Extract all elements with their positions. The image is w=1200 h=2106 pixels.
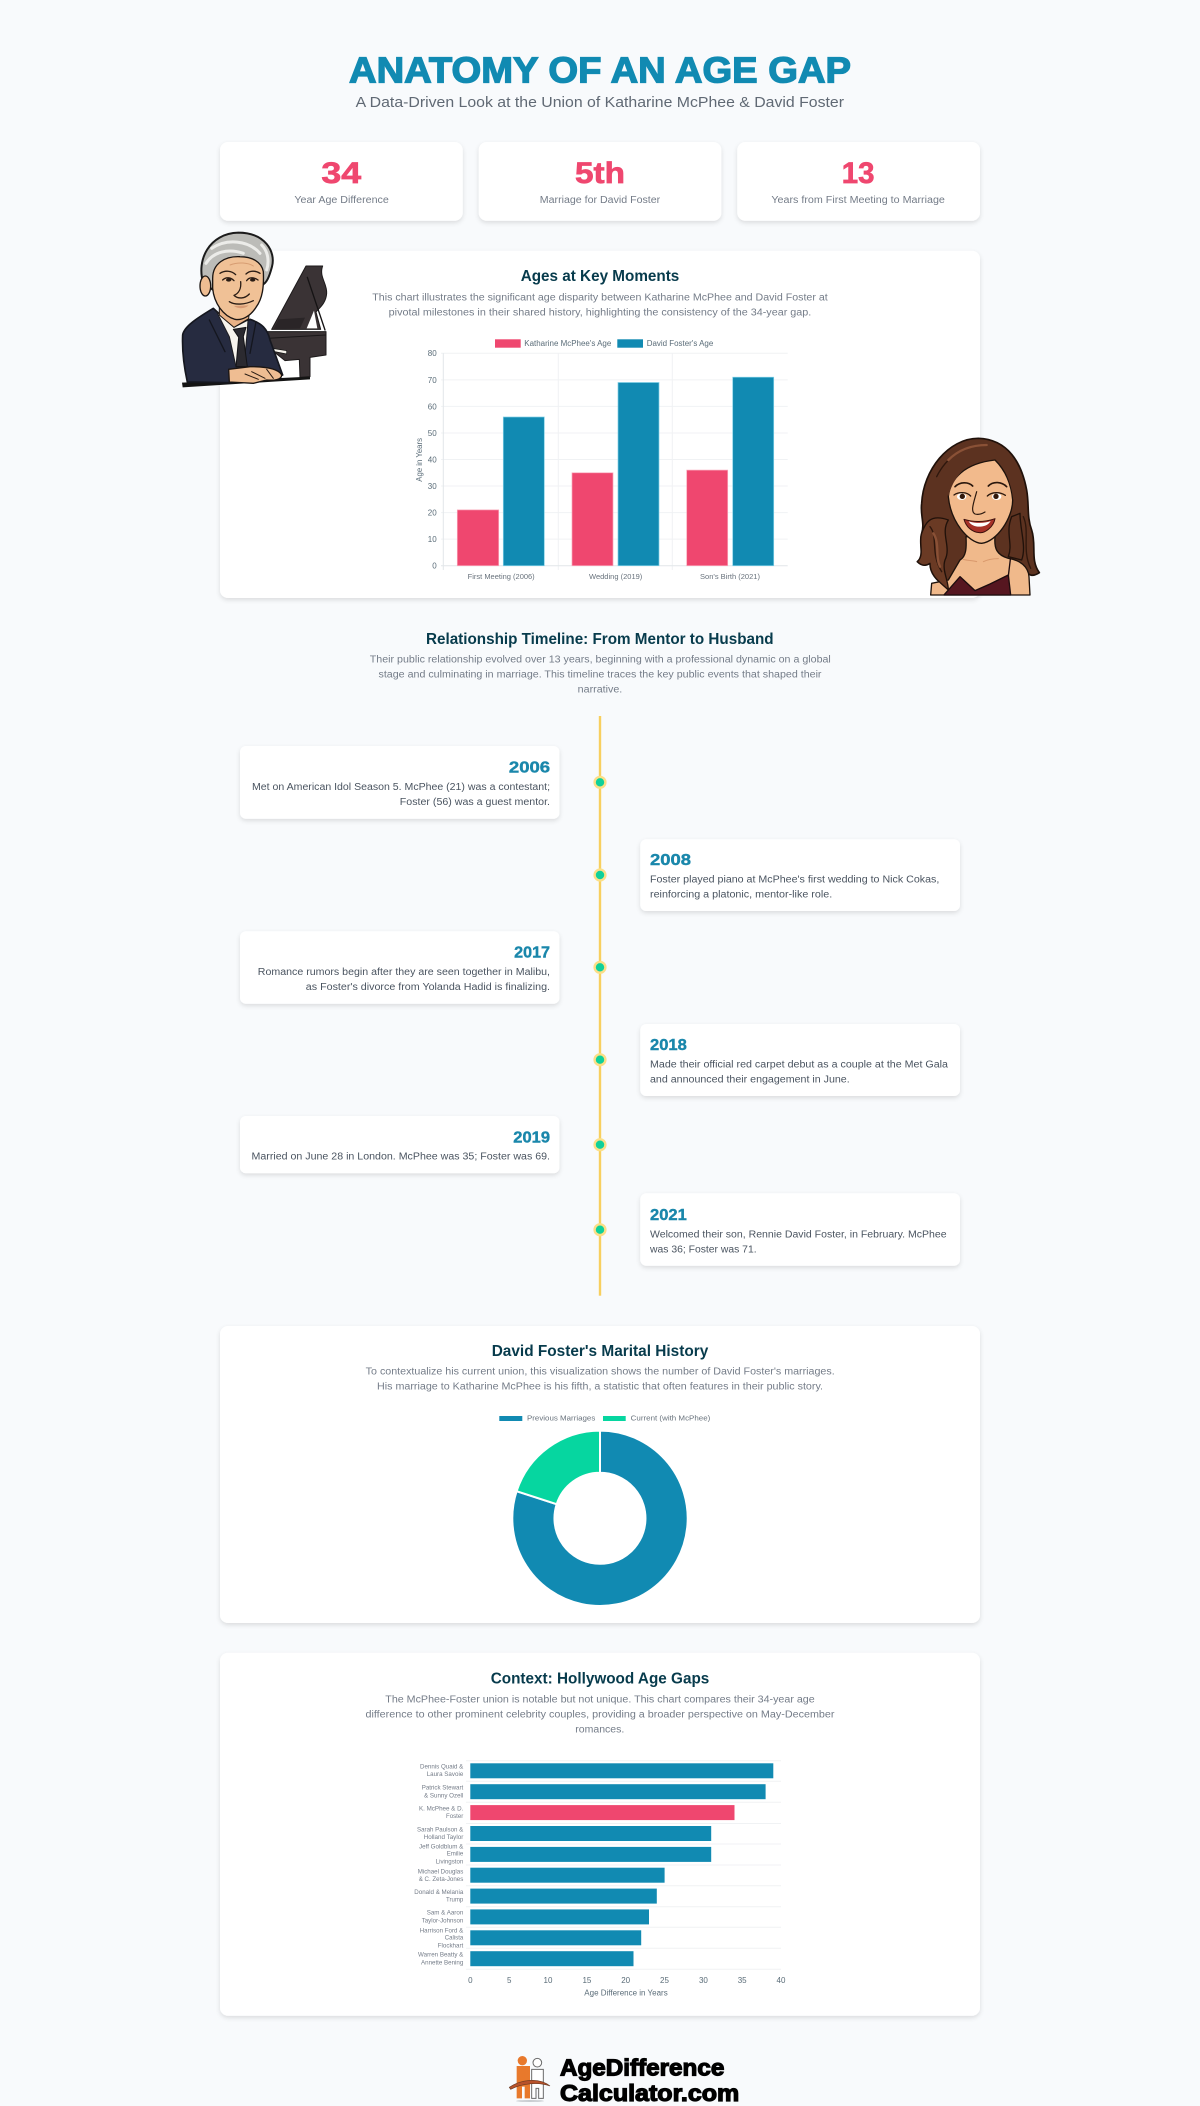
footer logo	[509, 2055, 739, 2106]
stat card: years to marriage: 13	[842, 157, 874, 190]
title: ANATOMY OF AN AGE GAP	[349, 49, 851, 90]
timeline card: 2019: 2019	[513, 1129, 550, 1146]
description: timeline	[370, 655, 831, 696]
timeline card: 2018: and announced their engagement in June.	[650, 1074, 850, 1085]
couple labels: Annette Bening	[421, 1959, 464, 1966]
icon: Katharine McPhee	[917, 438, 1039, 595]
hair	[201, 233, 273, 290]
timeline card: 2021: was 36; Foster was 71.	[649, 1244, 757, 1255]
stat card: years to marriage: Years from First Meeting to Marriage	[771, 195, 945, 206]
x axis title: Age Difference in Years	[584, 1989, 668, 1998]
timeline card: 2017	[240, 931, 560, 1004]
timeline card: 2021: 2021	[650, 1207, 687, 1224]
dress	[944, 575, 1011, 595]
description: hollywood age gaps: The McPhee-Foster union is notable but not unique. This chart compares their 34-year age	[385, 1694, 815, 1705]
timeline card: 2019	[240, 1116, 560, 1173]
description: timeline: Their public relationship evolved over 13 years, beginning with a professional dynamic on a global	[370, 655, 831, 666]
chart legend	[495, 339, 714, 348]
neck and shoulders	[931, 537, 1030, 595]
couple labels: Calista	[445, 1935, 464, 1942]
timeline axis	[599, 716, 601, 1296]
x axis ticks: 0	[468, 1976, 473, 1985]
stat card: age difference: 34	[321, 157, 362, 190]
panel: ages at key moments	[220, 251, 980, 598]
timeline card: 2018: Made their official red carpet debut as a couple at the Met Gala	[650, 1059, 948, 1070]
description: timeline: stage and culminating in marriage. This timeline traces the key public events that shaped their	[378, 670, 822, 681]
timeline dots	[595, 777, 605, 1235]
piano body	[266, 332, 326, 377]
icon: two people	[509, 2056, 550, 2102]
neck	[219, 302, 250, 327]
couple labels: Foster	[446, 1813, 464, 1820]
couple labels: Michael Douglas	[418, 1869, 464, 1876]
x axis ticks: 30	[699, 1976, 708, 1985]
table edge	[182, 377, 310, 387]
x axis ticks: 5	[507, 1976, 512, 1985]
description: ages chart	[372, 292, 828, 318]
timeline card: 2017: as Foster's divorce from Yolanda Hadid is finalizing.	[306, 982, 550, 993]
facial features	[220, 271, 260, 304]
timeline card: 2021: Welcomed their son, Rennie David Foster, in February. McPhee	[650, 1229, 947, 1240]
y axis labels: 80	[428, 349, 437, 358]
y axis labels: 10	[428, 535, 437, 544]
timeline card: 2019: Married on June 28 in London. McPhee was 35; Foster was 69.	[252, 1152, 550, 1163]
couple labels: Dennis Quaid &	[420, 1764, 464, 1771]
y axis labels: 20	[428, 508, 437, 518]
stat card: marriage count	[479, 142, 721, 221]
shirt and tie	[217, 312, 248, 367]
stat card: age difference: Year Age Difference	[294, 195, 389, 206]
donut legend: Previous Marriages	[527, 1416, 596, 1423]
couple labels: Harrison Ford &	[420, 1927, 464, 1934]
x axis ticks: 10	[544, 1976, 553, 1985]
hair back	[917, 438, 1039, 590]
couple labels: Flockhart	[438, 1942, 463, 1949]
stat card: marriage count: 5th	[575, 157, 625, 190]
footer logo: Calculator.com	[560, 2080, 739, 2106]
timeline card: 2018	[640, 1024, 960, 1096]
timeline card: 2006	[240, 746, 560, 819]
face	[213, 257, 263, 320]
couple labels: Donald & Melania	[414, 1889, 464, 1896]
y axis labels: 70	[428, 376, 437, 385]
couple labels: Livingston	[436, 1858, 464, 1865]
donut chart	[512, 1431, 688, 1606]
x axis ticks	[468, 1976, 786, 1985]
description: timeline: narrative.	[578, 685, 622, 696]
face	[948, 460, 1013, 543]
timeline card: 2008: Foster played piano at McPhee's first wedding to Nick Cokas,	[650, 875, 939, 886]
timeline card: 2008: reinforcing a platonic, mentor-like role.	[650, 890, 832, 901]
stat card: years to marriage	[737, 142, 980, 221]
y axis labels: 30	[428, 482, 437, 491]
y axis title: Age in Years	[415, 438, 424, 482]
x axis labels: Son's Birth (2021)	[700, 574, 760, 581]
chart legend: David Foster's Age	[647, 339, 714, 348]
x axis ticks: 25	[660, 1976, 669, 1985]
couple labels	[414, 1764, 464, 1966]
front hair lock	[917, 518, 948, 590]
y axis labels	[428, 349, 437, 571]
couple labels: Emilie	[447, 1851, 464, 1858]
bar chart: ages	[415, 339, 788, 581]
timeline card: 2006: Met on American Idol Season 5. McPhee (21) was a contestant;	[252, 782, 550, 793]
panel: hollywood age gaps	[220, 1653, 980, 2016]
heading: marital history: David Foster's Marital History	[492, 1343, 708, 1360]
icon: David Foster at the piano	[182, 233, 327, 387]
piano lid	[272, 266, 327, 329]
timeline card: 2018: 2018	[650, 1037, 687, 1054]
couple labels: Patrick Stewart	[422, 1785, 463, 1792]
x axis ticks: 35	[738, 1976, 747, 1985]
panel: marital history	[220, 1326, 980, 1623]
x axis ticks: 15	[582, 1976, 592, 1985]
couple labels: Trump	[446, 1897, 464, 1904]
footer logo: AgeDifference	[560, 2055, 724, 2081]
timeline card: 2006: 2006	[509, 759, 550, 776]
couple labels: Sam & Aaron	[427, 1910, 464, 1917]
description: hollywood age gaps: romances.	[575, 1724, 624, 1735]
description: hollywood age gaps	[366, 1694, 835, 1735]
ear	[200, 276, 211, 296]
x axis labels: Wedding (2019)	[589, 574, 642, 581]
y axis labels: 50	[428, 429, 437, 438]
couple labels: K. McPhee & D.	[419, 1806, 463, 1813]
heading: ages at key moments: Ages at Key Moments	[521, 268, 679, 285]
hair strands	[930, 445, 1031, 572]
timeline card: 2017: Romance rumors begin after they are seen together in Malibu,	[258, 967, 550, 978]
timeline card: 2008	[640, 839, 960, 911]
x axis ticks: 40	[777, 1976, 786, 1985]
timeline card: 2008: 2008	[650, 852, 691, 869]
heading: hollywood age gaps: Context: Hollywood Age Gaps	[491, 1671, 709, 1688]
couple labels: Jeff Goldblum &	[419, 1843, 464, 1850]
couple labels: Holland Taylor	[424, 1834, 464, 1841]
y axis labels: 40	[428, 455, 437, 464]
description: ages chart: This chart illustrates the significant age disparity between Katharine McPhee and David Foster at	[372, 292, 828, 303]
x axis ticks: 20	[621, 1976, 631, 1985]
heading: relationship timeline: Relationship Timeline: From Mentor to Husband	[426, 631, 774, 648]
timeline card: 2017: 2017	[514, 945, 550, 962]
description: ages chart: pivotal milestones in their shared history, highlighting the consistency of the 34-year gap.	[389, 307, 811, 318]
description: marital history	[366, 1367, 835, 1393]
horizontal bar chart	[414, 1761, 786, 1998]
couple labels: Laura Savoie	[427, 1771, 464, 1778]
couple labels: Sarah Paulson &	[417, 1827, 464, 1834]
subtitle: A Data-Driven Look at the Union of Katharine McPhee & David Foster	[356, 94, 844, 111]
x axis labels	[468, 574, 760, 581]
description: hollywood age gaps: difference to other prominent celebrity couples, providing a broader perspective on May-December	[366, 1709, 835, 1720]
stat card: age difference	[220, 142, 463, 221]
timeline card: 2021	[640, 1193, 960, 1266]
couple labels: Warren Beatty &	[418, 1952, 464, 1959]
stat card: marriage count: Marriage for David Foster	[540, 195, 661, 206]
description: marital history: His marriage to Katharine McPhee is his fifth, a statistic that often features in their public story.	[377, 1382, 823, 1393]
donut legend	[499, 1416, 710, 1423]
y axis labels: 0	[432, 562, 437, 571]
couple labels: & Sunny Ozell	[424, 1792, 464, 1799]
couple labels: & C. Zeta-Jones	[419, 1876, 464, 1883]
description: marital history: To contextualize his current union, this visualization shows the number of David Foster's marriages.	[366, 1367, 835, 1378]
suit	[183, 308, 283, 383]
x axis labels: First Meeting (2006)	[468, 574, 535, 581]
facial features	[954, 483, 1007, 514]
hands	[229, 367, 282, 383]
chart legend: Katharine McPhee's Age	[524, 339, 612, 348]
y axis labels: 60	[428, 402, 437, 411]
donut legend: Current (with McPhee)	[631, 1416, 710, 1423]
timeline card: 2006: Foster (56) was a guest mentor.	[400, 797, 550, 808]
couple labels: Taylor-Johnson	[422, 1917, 464, 1924]
